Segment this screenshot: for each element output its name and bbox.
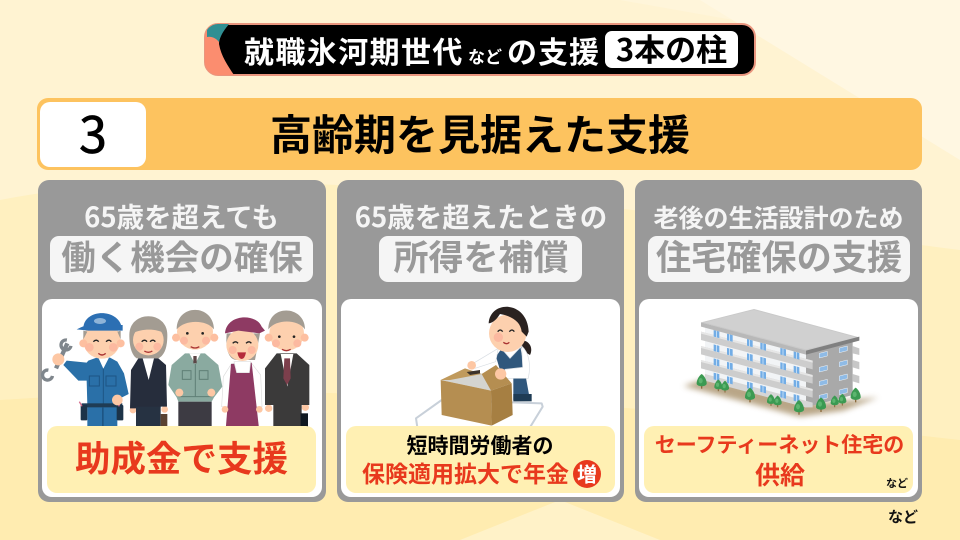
building side wall [806,340,853,407]
title badge: 3本の柱: 3本の柱 [616,25,727,70]
panel 2 callout [346,426,615,493]
title text: など [468,48,502,67]
panel 1 callout [47,426,316,493]
title corner accent [205,24,234,75]
front windows [714,330,799,402]
callout second line: 保険適用拡大で年金 [362,461,569,487]
panel 2 white card [341,299,620,497]
panel 2 heading: 所得を補償 [393,239,569,278]
panel 1 heading: 働く機会の確保 [61,240,303,278]
ground [683,377,878,417]
panel 1 white card [42,299,322,497]
side balconies [853,346,859,383]
man in dark suit [265,310,309,428]
panel: income compensation [337,180,624,502]
panel 2 subtitle: 65歳を超えたときの [355,195,607,235]
table [416,400,543,427]
callout first line: セーフティーネット住宅の [655,434,904,457]
panel 3 subtitle: 老後の生活設計のため [653,199,904,235]
footnote: など [888,509,918,526]
badge: increase [573,460,601,488]
badge: increase: 増 [577,464,597,486]
section heading: 高齢期を見据えた支援 [270,112,690,159]
section header bar [37,96,922,170]
trees [697,374,861,415]
illustration: five elderly workers [43,310,309,428]
panel 1 callout: 助成金で支援 [75,439,288,479]
callout second line: 供給 [755,462,805,490]
panel: housing [635,180,922,502]
panel 3 heading: 住宅確保の支援 [656,239,902,278]
worker in blue [43,313,129,428]
section number box: 3 [79,96,107,168]
section number box [40,96,146,168]
panel 3 white card [639,299,918,497]
illustration: woman packing a box [416,307,543,427]
woman [467,307,532,401]
panel 1 subtitle: 65歳を超えても [84,195,279,235]
woman in apron [222,317,265,428]
woman in dark suit [129,316,168,428]
panel 3 callout [644,426,913,493]
roof [701,309,859,352]
title text: 就職氷河期世代 [244,37,464,70]
cardboard box [441,365,513,426]
panel: work opportunities [38,180,326,502]
man in green jacket [168,310,222,428]
illustration: apartment building [683,309,878,417]
front balconies [701,332,813,407]
building front wall [705,327,806,407]
side windows [819,346,847,400]
title text: の支援 [507,37,600,70]
callout first line: 短時間労働者の [406,435,554,458]
title bar [205,24,755,75]
callout note: など [886,476,908,490]
